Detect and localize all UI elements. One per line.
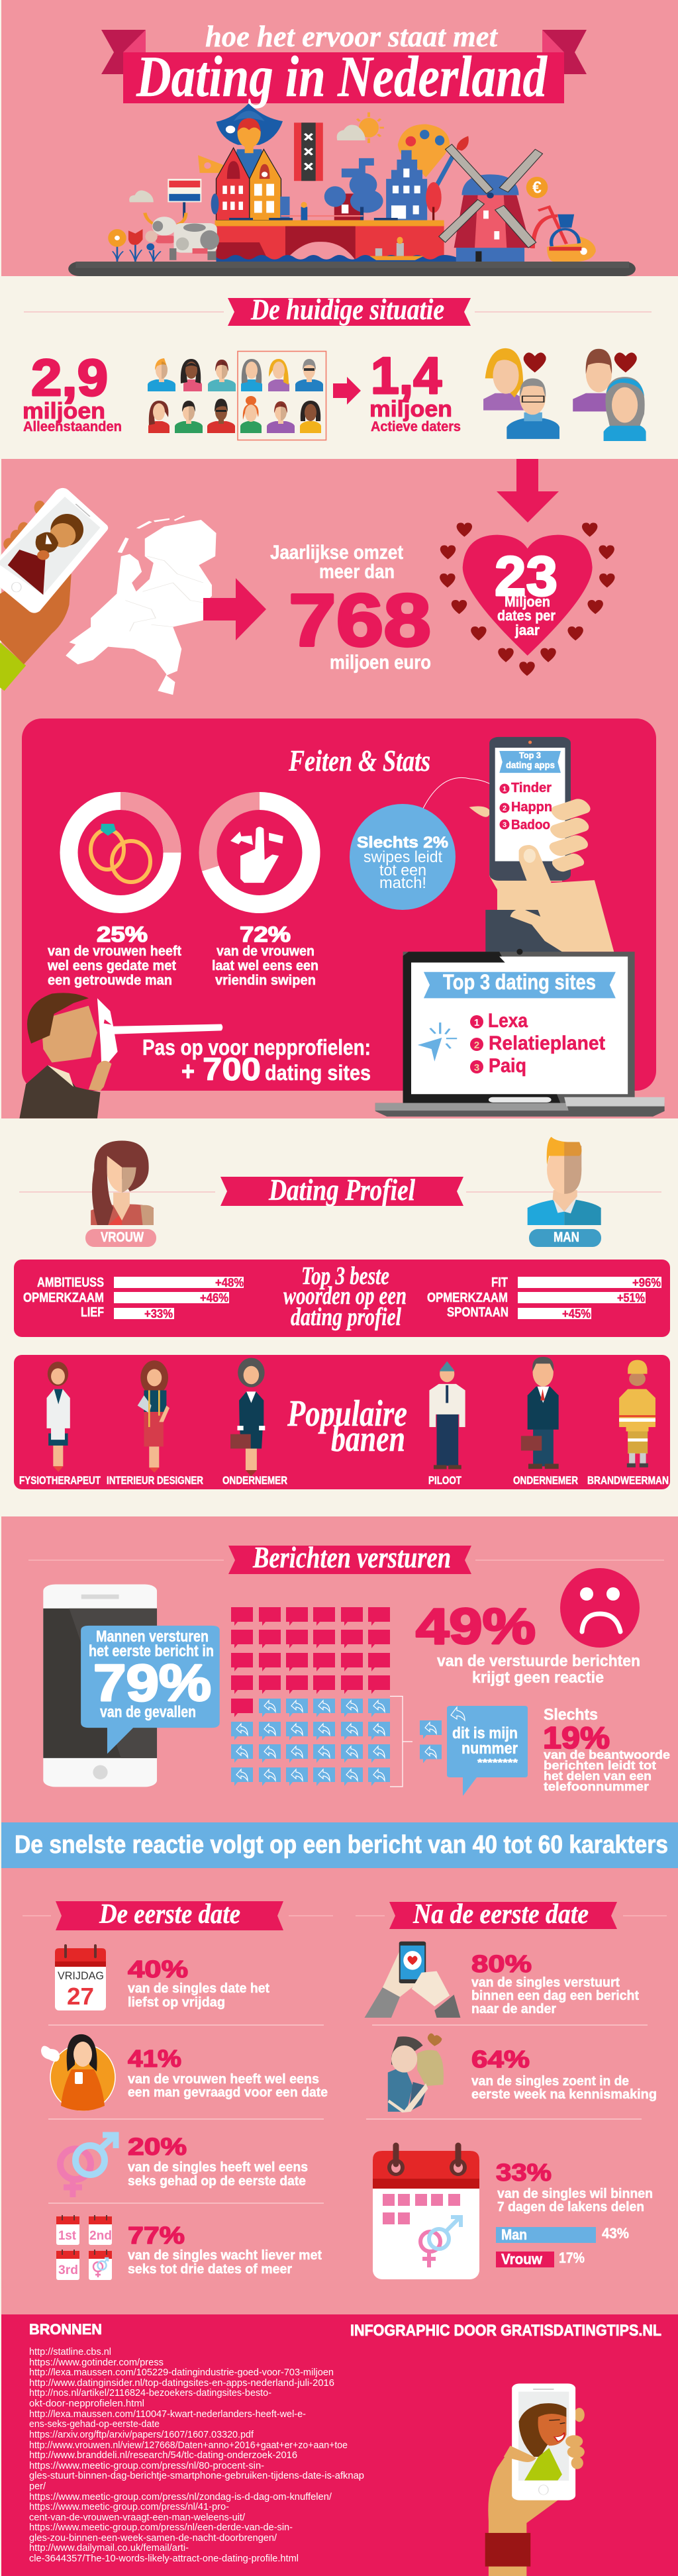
- heading: Populaire: [287, 1393, 407, 1434]
- sites list: 1: [474, 1017, 479, 1028]
- stat: 19%: het delen van een: [544, 1769, 652, 1783]
- apps list: Badoo: [511, 818, 550, 832]
- figure: ondernemer vrouw: [230, 1358, 265, 1477]
- icon: woman with phone: [41, 2034, 115, 2111]
- stat: 41%: een man gevraagd voor een date: [128, 2085, 328, 2100]
- label pill: [85, 1229, 156, 1247]
- arrow from map: [203, 578, 266, 640]
- fingers: [546, 797, 594, 873]
- heading: De huidige situatie: [24, 293, 652, 326]
- stat: 33%: 7 dagen de lakens delen: [497, 2200, 644, 2214]
- avatar: man: [528, 1137, 601, 1247]
- center heading: dating profiel: [291, 1303, 401, 1331]
- stat 72 text: laat wel eens een: [212, 958, 318, 973]
- source list: http://lexa.maussen.com/105229-datingindustrie-goed-voor-703-miljoen: [29, 2367, 334, 2378]
- phone body: [489, 737, 571, 881]
- icon: big calendar: [373, 2146, 479, 2279]
- icon: cloud left: [129, 190, 154, 202]
- big heart: [463, 535, 593, 656]
- heading: [287, 1393, 407, 1460]
- heading: Berichten versturen: Berichten versturen: [252, 1540, 451, 1574]
- icon: four calendars: 1st: [58, 2229, 77, 2243]
- avatar: vrouw: [85, 1141, 156, 1247]
- stat: 40%: van de singles date het: [128, 1981, 269, 1996]
- sites list: Relatieplanet: [489, 1032, 605, 1054]
- panel: Feiten & Stats: [19, 718, 665, 1118]
- stat: 768 miljoen euro: meer dan: [319, 561, 395, 583]
- stat: 77%: 77%: [128, 2222, 185, 2249]
- stat: 40%: liefst op vrijdag: [128, 1995, 225, 2010]
- job labels: INTERIEUR DESIGNER: [107, 1474, 203, 1487]
- man with long nose: [19, 993, 222, 1118]
- avatar: vrouw: VROUW: [101, 1230, 144, 1245]
- icon: Dutch woman hat: [217, 103, 283, 183]
- bar: vrouw: Vrouw: [501, 2251, 543, 2267]
- selection box: [238, 351, 326, 440]
- sites ribbon: [424, 972, 616, 998]
- fingers back: [574, 2408, 585, 2422]
- header title banner: [101, 19, 587, 109]
- stat: 20%: [128, 2133, 308, 2189]
- stat: 80%: van de singles verstuurt: [471, 1975, 620, 1990]
- stat: 77%: seks tot drie dates of meer: [128, 2262, 292, 2277]
- icon: cursor: [418, 1022, 457, 1062]
- donut 25%: [69, 801, 172, 905]
- warning text: +: [181, 1057, 195, 1086]
- heading: De huidige situatie: De huidige situatie: [250, 293, 444, 326]
- phone: [43, 1584, 157, 1787]
- section dividers: [48, 2025, 648, 2203]
- apps ribbon text: Top 3: [519, 750, 541, 760]
- screen: [411, 957, 628, 1094]
- stat: 2,9 miljoen alleenstaanden: Alleenstaanden: [23, 419, 122, 434]
- icon: palette and brush: [398, 124, 469, 186]
- source list: https://arxiv.org/ftp/arxiv/papers/1607/1607.03320.pdf: [29, 2429, 254, 2440]
- icon: tulips: [108, 229, 161, 262]
- icon: sun and cloud: [337, 113, 384, 143]
- source list: http://lexa.maussen.com/110047-kwart-nederlanders-heeft-wel-e-: [29, 2408, 306, 2420]
- apps list: Happn: [511, 800, 552, 815]
- bar: vrouw: 17%: [559, 2250, 585, 2266]
- stat: 80%: [471, 1950, 639, 2016]
- icon: clog, bicycle and coin: €: [532, 179, 542, 197]
- icon: swipe hand: [230, 826, 283, 883]
- stat: 77%: van de singles wacht liever met: [128, 2248, 322, 2263]
- icon: wedding rings: [91, 824, 150, 882]
- warning text: 700: [203, 1052, 261, 1087]
- icon: bridge: [215, 202, 456, 262]
- mask and nose: [97, 998, 222, 1071]
- stat 25 text: van de vrouwen heeft: [48, 944, 181, 959]
- street base: [68, 262, 636, 276]
- bar: man: [496, 2225, 629, 2243]
- stat: 49%: [416, 1599, 640, 1687]
- apps list: 2: [503, 805, 507, 813]
- callout: swipes: [350, 777, 497, 910]
- bracket and number bubbles: [390, 1697, 528, 1796]
- source list: https://www.meetic-group.com/press/nl/41-pro-: [29, 2501, 229, 2512]
- bars man: +51%: [617, 1291, 645, 1305]
- stat: 1,4 miljoen actieve daters: Actieve daters: [371, 419, 461, 434]
- bar: vrouw: [496, 2250, 585, 2267]
- icon: calendar vrijdag: VRIJDAG: [58, 1969, 104, 1982]
- stat: 1,4 miljoen actieve daters: miljoen: [369, 397, 452, 422]
- stat: 49%: 49%: [416, 1599, 536, 1655]
- bubble: dit is mijn nummer: ********: [477, 1758, 518, 1769]
- source list: http://www.dailymail.co.uk/femail/arti-: [29, 2542, 189, 2553]
- stat 25 text: een getrouwde man: [48, 973, 172, 988]
- apps list: [499, 781, 552, 832]
- panel: top 3 words: [14, 1260, 670, 1337]
- couples icons: [483, 348, 646, 441]
- source list: https://www.gotinder.com/press: [29, 2357, 164, 2368]
- stat: 64%: eerste week na kennismaking: [471, 2087, 657, 2102]
- sites list: Lexa: [488, 1010, 528, 1032]
- fingers: [3, 501, 46, 550]
- job labels: [19, 1474, 669, 1487]
- photo man: [8, 550, 46, 595]
- banner: snelste reactie: [1, 1822, 678, 1868]
- arm: [0, 568, 72, 664]
- icon: kissing couple: [388, 2034, 444, 2112]
- callout: swipes: swipes leidt: [363, 848, 442, 866]
- bars man: +45%: [562, 1307, 591, 1320]
- ribbon: [123, 52, 564, 103]
- bars vrouw: [23, 1275, 244, 1320]
- stat: 40%: [128, 1956, 269, 2010]
- stat: 19%: berichten leidt tot: [544, 1759, 656, 1772]
- face: [41, 1006, 97, 1062]
- bar: man: 43%: [602, 2225, 629, 2242]
- icon: four calendars: [56, 2215, 112, 2280]
- job labels: FYSIOTHERAPEUT: [19, 1474, 101, 1487]
- stat: 20%: 20%: [128, 2133, 187, 2160]
- apps list: Tinder: [511, 781, 552, 795]
- job labels: ONDERNEMER: [513, 1474, 578, 1487]
- icon: calendar vrijdag: 27: [67, 1983, 94, 2010]
- stat: 768 miljoen euro: 768: [289, 579, 431, 662]
- icon: cheese: [198, 155, 225, 173]
- figure: fysiotherapeut: [47, 1362, 70, 1472]
- stat: 33%: van de singles wil binnen: [497, 2187, 653, 2201]
- center heading: woorden op een: [283, 1282, 407, 1310]
- stat: 2,9 miljoen alleenstaanden: miljoen: [23, 399, 105, 424]
- title: Dating in Nederland: [136, 45, 548, 109]
- suit: [19, 1065, 100, 1118]
- map of the Netherlands: [66, 515, 217, 695]
- stat: 19%: Slechts: [544, 1706, 598, 1724]
- icon: cow: [145, 213, 219, 260]
- warning text: Pas op voor nepprofielen:: [142, 1035, 371, 1060]
- stat: 49%: krijgt geen reactie: [472, 1669, 604, 1687]
- figure: piloot: [429, 1361, 465, 1469]
- ribbon tails: [101, 30, 587, 74]
- stat 72 text: 72%: [240, 922, 291, 946]
- stat: 19%: van de beantwoorde: [544, 1748, 670, 1761]
- bubble: [81, 1626, 220, 1754]
- icon: windmill: [439, 144, 543, 262]
- label pill: [529, 1229, 601, 1247]
- source list: http://nos.nl/artikel/2116824-bezoekers-datingsites-besto-: [29, 2387, 271, 2399]
- source list: http://www.datinginsider.nl/top-datingsites-en-apps-nederland-juli-2016: [29, 2377, 334, 2389]
- icon: four calendars: 2nd: [89, 2229, 112, 2243]
- panel: footer bronnen: [1, 2314, 678, 2576]
- source list: okt-door-nepprofielen.html: [29, 2398, 144, 2409]
- heading: Dating Profiel: [19, 1173, 661, 1207]
- stat: 41%: van de vrouwen heeft wel eens: [128, 2072, 319, 2087]
- stat: 80%: binnen een dag een bericht: [471, 1989, 639, 2003]
- stat: 768 miljoen euro: miljoen euro: [330, 652, 431, 673]
- bars vrouw: OPMERKZAAM: [23, 1291, 104, 1305]
- source list: ens-seks-gehad-op-eerste-date: [29, 2418, 160, 2430]
- hand: [510, 845, 614, 952]
- icon: sad face: [560, 1568, 640, 1648]
- stat: 20%: seks gehad op de eerste date: [128, 2174, 306, 2189]
- stat: 64%: van de singles zoent in de: [471, 2074, 629, 2089]
- heading: bronnen: BRONNEN: [29, 2321, 102, 2338]
- stat: 80%: naar de ander: [471, 2002, 556, 2016]
- callout: swipes: match!: [379, 874, 426, 892]
- heart: 23 miljoen dates per jaar: dates per: [497, 607, 556, 624]
- stat: 33%: 33%: [496, 2159, 552, 2186]
- heart: 23 miljoen dates per jaar: 23: [495, 545, 557, 607]
- couple 1: [483, 348, 559, 439]
- stat: 20%: van de singles heeft wel eens: [128, 2160, 308, 2175]
- stat 25 text: wel eens gedate met: [47, 958, 176, 973]
- source list: https://www.meetic-group.com/press/nl/80-procent-sin-: [29, 2460, 264, 2471]
- heading: De eerste date: [23, 1899, 333, 1930]
- icon: clog, bicycle and coin: [526, 177, 596, 262]
- center heading: Top 3 beste: [301, 1262, 389, 1290]
- stat: 1,4 miljoen actieve daters: 1,4: [371, 346, 442, 405]
- people grid: [148, 351, 326, 440]
- phone with bubble: van de gevallen: [100, 1703, 196, 1721]
- stat: 19%: [543, 1706, 670, 1793]
- avatar: man: MAN: [554, 1230, 579, 1245]
- apps list: 1: [503, 785, 507, 793]
- laptop lid: [403, 952, 635, 1103]
- heading: Feiten & Stats: [288, 744, 430, 777]
- heading: De eerste date: De eerste date: [99, 1899, 240, 1930]
- icon: canal houses: [211, 148, 290, 221]
- small hearts: [440, 522, 615, 676]
- heading: Na de eerste date: [356, 1899, 667, 1930]
- heading: Berichten versturen: [28, 1540, 664, 1574]
- stat: 41%: [128, 2045, 328, 2100]
- bubble: dit is mijn nummer: [447, 1706, 528, 1796]
- panel: populaire banen: [14, 1355, 670, 1489]
- stat 72 text: van de vrouwen: [217, 944, 315, 959]
- arm: [488, 2446, 560, 2576]
- sites list: [470, 1010, 605, 1077]
- warning text: [142, 1035, 371, 1087]
- arrow right: [333, 377, 361, 405]
- icon: Amsterdam flag: [294, 123, 323, 181]
- source list: gles-zou-binnen-een-week-samen-de-nacht-doorbrengen/: [29, 2532, 277, 2544]
- bars vrouw: AMBITIEUSS: [37, 1275, 104, 1290]
- source list: https://www.meetic-group.com/press/nl/een-derde-van-de-sin-: [29, 2522, 293, 2533]
- phone with bubble: Mannen versturen: [96, 1628, 209, 1646]
- bars vrouw: +33%: [144, 1307, 173, 1320]
- stat: 49%: van de verstuurde berichten: [437, 1652, 640, 1670]
- stat: 1,4 miljoen actieve daters: [369, 346, 461, 434]
- phone with bubble: 79%: [93, 1654, 211, 1712]
- stat: 2,9 miljoen alleenstaanden: 2,9: [31, 348, 108, 407]
- finger: [37, 550, 49, 560]
- phone: [0, 488, 108, 613]
- icon: hands with phone: [364, 1942, 460, 2018]
- bars vrouw: LIEF: [81, 1305, 104, 1320]
- bars man: OPMERKZAAM: [427, 1291, 508, 1305]
- bubble: dit is mijn nummer: nummer: [461, 1740, 518, 1758]
- phone: [512, 2383, 575, 2501]
- donut 72%: [208, 801, 311, 905]
- bars man: [427, 1275, 661, 1320]
- laptop with top 3 sites: [375, 949, 665, 1116]
- source list: [29, 2346, 364, 2564]
- stat: 19%: telefoonnummer: [544, 1780, 649, 1793]
- bar: man: Man: [501, 2226, 527, 2243]
- icon: Dutch flag: [168, 179, 201, 219]
- sites list: 2: [474, 1040, 479, 1051]
- stat: 80%: 80%: [471, 1950, 532, 1977]
- hand: [89, 1061, 111, 1091]
- bars man: FIT: [491, 1275, 508, 1290]
- heart: 23 miljoen dates per jaar: jaar: [514, 622, 540, 638]
- job labels: PILOOT: [428, 1474, 461, 1487]
- sites list: 3: [474, 1062, 479, 1073]
- stat: 768 miljoen euro: Jaarlijkse omzet: [270, 542, 403, 564]
- figure: ondernemer man: [521, 1357, 559, 1469]
- job labels: ONDERNEMER: [222, 1474, 287, 1487]
- callout: swipes: Slechts 2%: [357, 834, 448, 852]
- bars man: +96%: [632, 1276, 661, 1289]
- stat: 77%: [128, 2222, 322, 2277]
- sleeve: [0, 642, 26, 691]
- laptop with top 3 sites: Top 3 dating sites: [443, 970, 596, 994]
- palm: [469, 806, 562, 910]
- icon: four calendars: 3rd: [58, 2263, 78, 2277]
- stat: 41%: 41%: [128, 2045, 181, 2072]
- cuff: [485, 2533, 530, 2567]
- heading: Dating Profiel: Dating Profiel: [268, 1173, 415, 1207]
- stat 25 text: 25%: [97, 922, 148, 946]
- heading: Na de eerste date: Na de eerste date: [412, 1899, 589, 1930]
- stat 25 text: [47, 922, 181, 988]
- apps list: 3: [503, 821, 507, 829]
- phone with top 3 apps: dating apps: [506, 760, 555, 770]
- source list: http://www.vrouwen.nl/view/127668/Daten+anno+2016+gaat+er+zo+aan+toe: [29, 2440, 348, 2451]
- message grid: [231, 1607, 390, 1786]
- base: [375, 1103, 665, 1116]
- phone with bubble: [43, 1584, 220, 1787]
- sleeve: [485, 910, 563, 953]
- stat: 33%: [496, 2159, 653, 2267]
- hand holding phone with woman: [485, 2383, 585, 2576]
- stat: 19%: 19%: [543, 1720, 610, 1755]
- source list: http://statline.cbs.nl: [29, 2346, 111, 2357]
- woman on screen: [519, 2403, 566, 2481]
- heart: 23 miljoen dates per jaar: Miljoen: [505, 593, 550, 610]
- couple 2: [573, 349, 646, 441]
- stat: 64%: 64%: [471, 2046, 530, 2073]
- figure: brandweerman: [619, 1360, 655, 1467]
- source list: https://www.meetic-group.com/press/nl/zondag-is-d-dag-om-knuffelen/: [29, 2491, 332, 2502]
- stat: 64%: [471, 2046, 657, 2102]
- hand holding phone: [0, 488, 108, 691]
- icon: calendar vrijdag: [55, 1946, 106, 2010]
- source list: http://www.branddeli.nl/research/54/tlc-dating-onderzoek-2016: [29, 2450, 297, 2461]
- figure: interieur designer: [138, 1360, 170, 1473]
- source list: cent-van-de-vrouwen-vraagt-een-man-weleens-uit/: [29, 2512, 246, 2523]
- camera: [516, 949, 522, 955]
- bars man: SPONTAAN: [447, 1305, 508, 1320]
- stat: 2,9 miljoen alleenstaanden: [23, 348, 122, 434]
- stat: 768 miljoen euro: [270, 542, 431, 673]
- phone with top 3 apps: [469, 737, 614, 953]
- heart: 23 miljoen dates per jaar: [440, 522, 615, 676]
- bars vrouw: +46%: [200, 1291, 228, 1305]
- warning text: dating sites: [265, 1061, 371, 1085]
- bubble: dit is mijn nummer: dit is mijn: [452, 1724, 518, 1742]
- bars vrouw: +48%: [215, 1276, 244, 1289]
- source list: per/: [29, 2481, 46, 2492]
- icon: gender symbols: [60, 2135, 116, 2197]
- arrow down: [497, 459, 559, 522]
- source list: gles-stuurt-binnen-dag-berichtje-smartphone-gebruiken-tijdens-date-is-afknap: [29, 2470, 364, 2481]
- heading: banen: [331, 1418, 405, 1460]
- icon: blue trees and house: [324, 150, 442, 221]
- phone with bubble: het eerste bericht in: [89, 1642, 214, 1660]
- subtitle: hoe het ervoor staat met: [205, 19, 498, 53]
- stat 72 text: [212, 922, 318, 988]
- sites list: Paiq: [489, 1055, 526, 1077]
- stat 72 text: vriendin swipen: [215, 973, 316, 988]
- illustration: Dutch city scene: [68, 103, 636, 276]
- hair: [27, 993, 89, 1044]
- fingers: [504, 2435, 585, 2469]
- source list: cle-3644357/The-10-words-likely-attract-one-dating-profile.html: [29, 2553, 299, 2564]
- stat: 40%: 40%: [128, 1956, 188, 1983]
- callout: swipes: tot een: [379, 862, 426, 879]
- center heading: [283, 1262, 407, 1331]
